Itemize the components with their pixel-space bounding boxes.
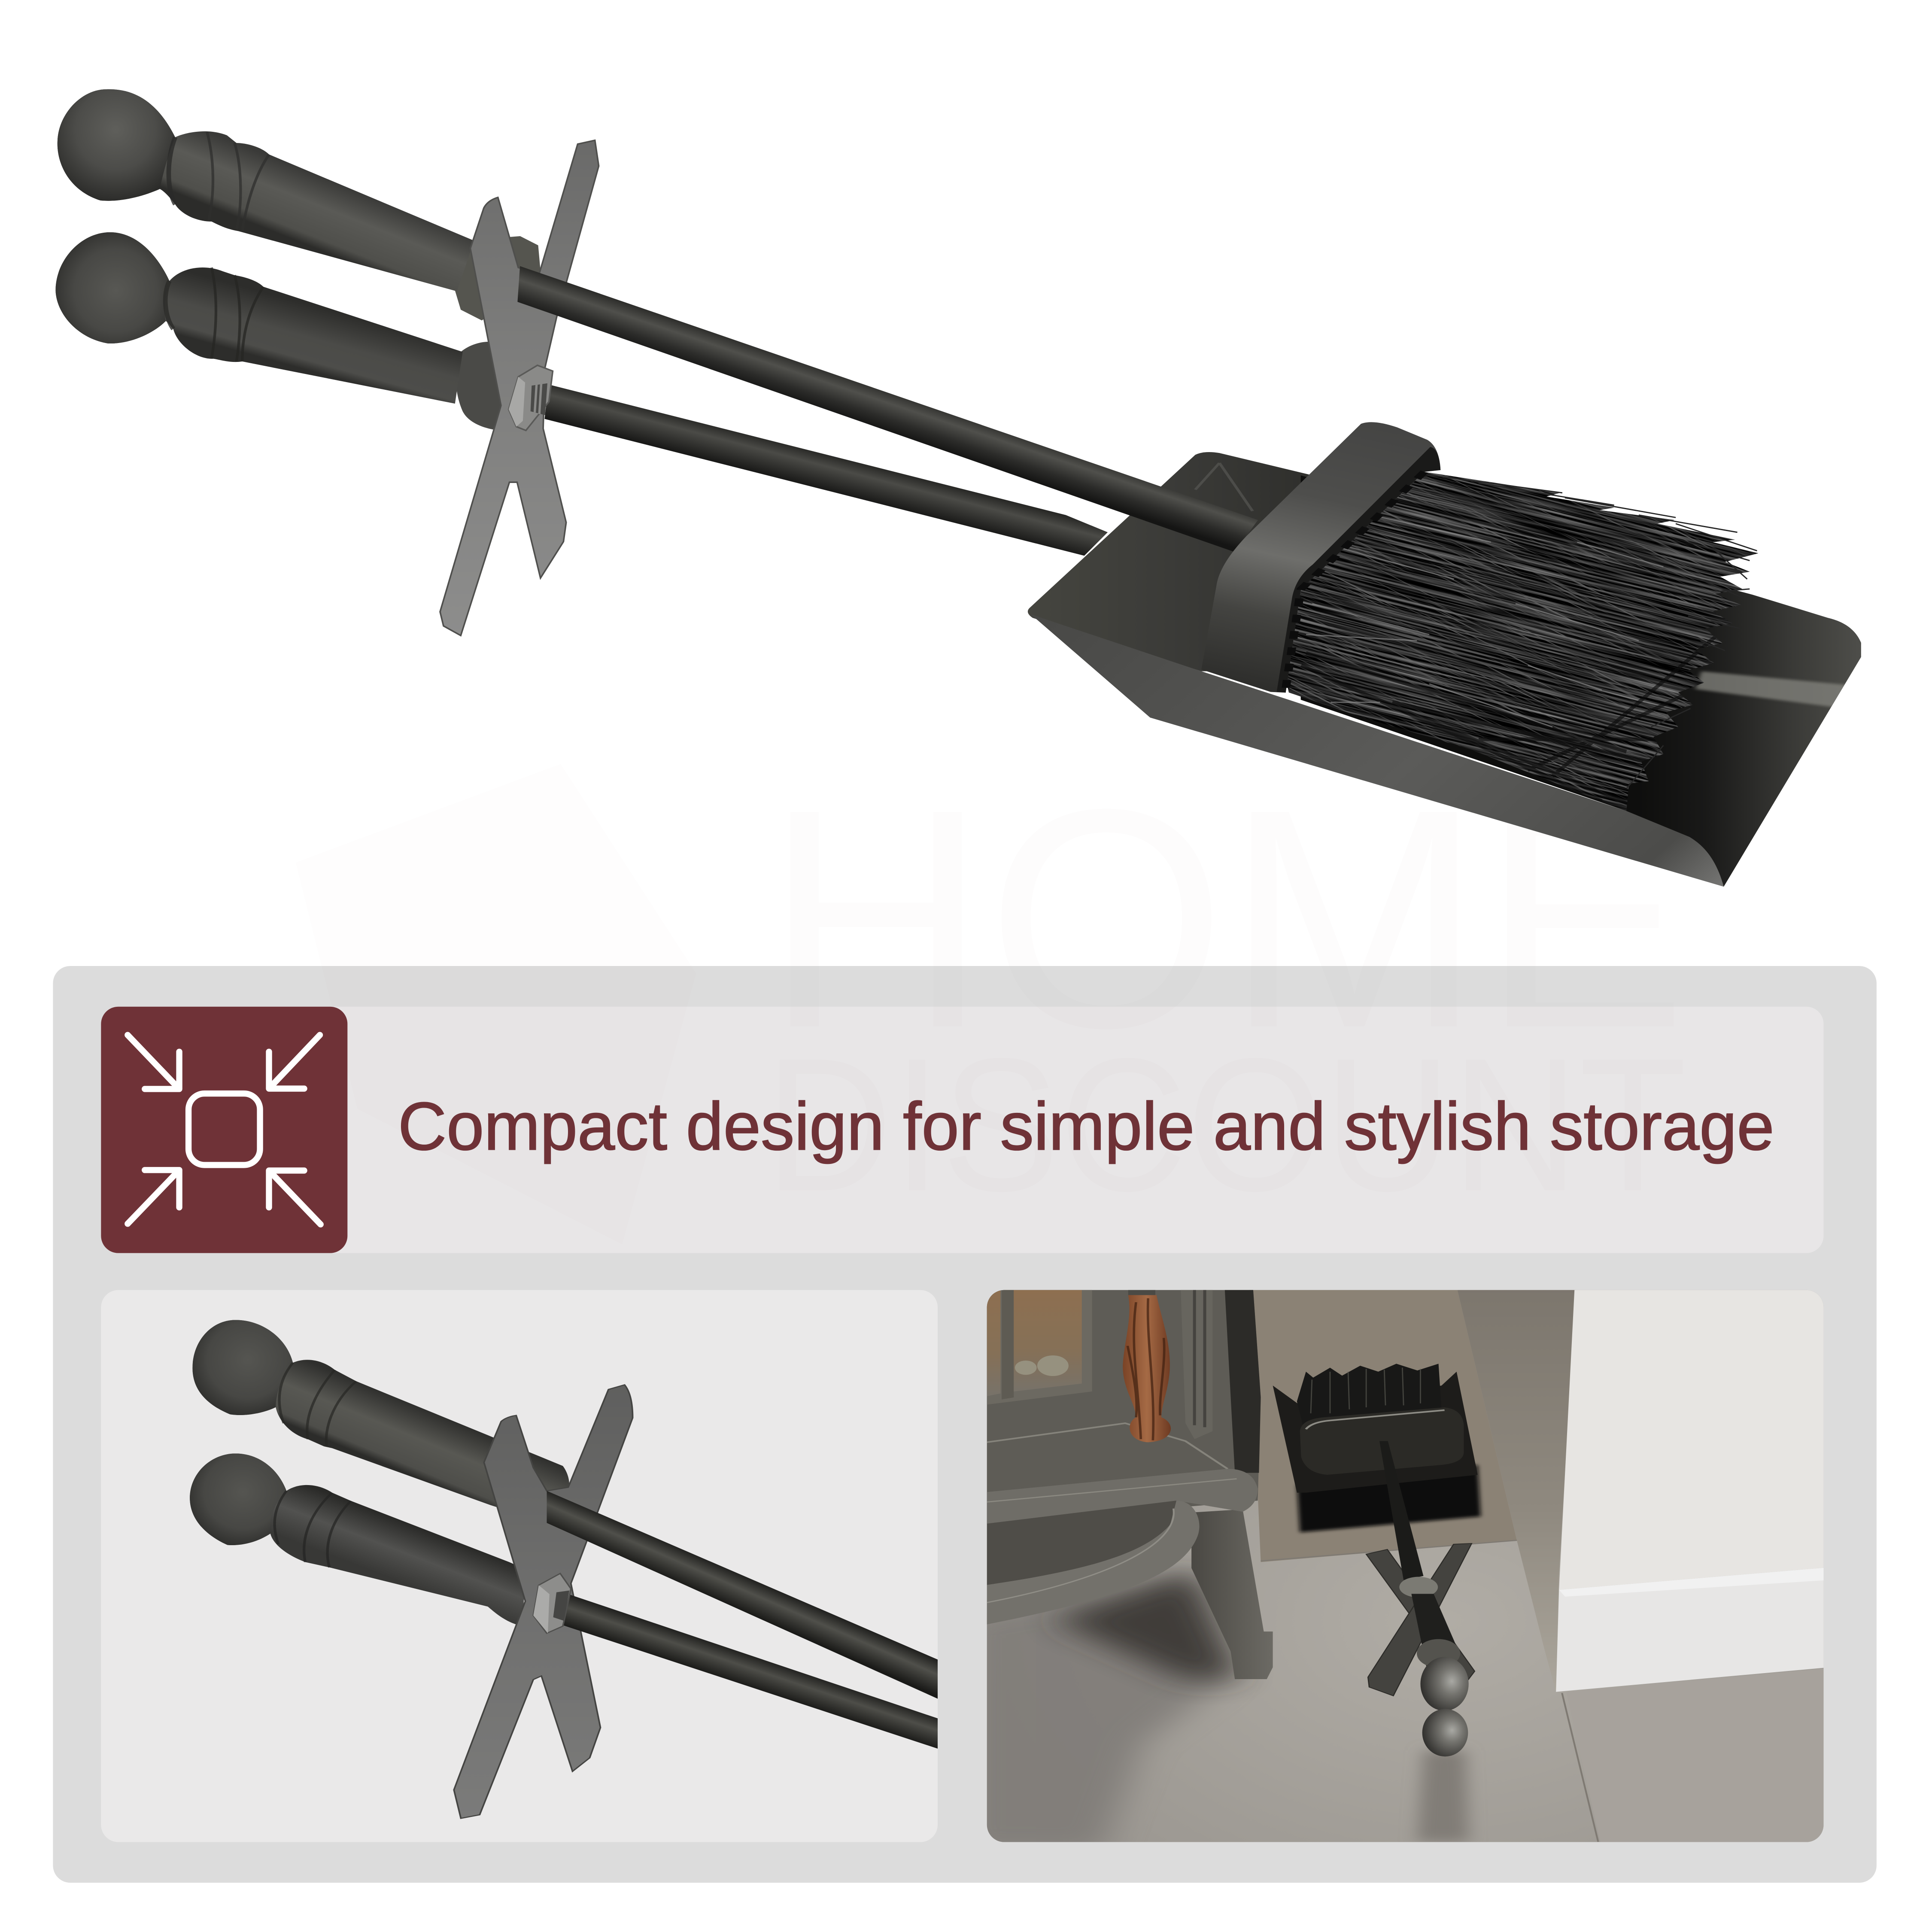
handle upper — [58, 89, 541, 320]
stove foot arch — [981, 1501, 1200, 1625]
handle upper inset — [192, 1320, 569, 1523]
dustpan — [1028, 452, 1873, 887]
handle rod upright — [1379, 1441, 1423, 1580]
dark shadow under stove — [1053, 1572, 1239, 1679]
handle bead — [1417, 1639, 1460, 1668]
skirting board — [1556, 1567, 1830, 1692]
handle lower — [55, 232, 505, 431]
brush ferrule — [1201, 422, 1440, 693]
fluted stove column — [1181, 1286, 1212, 1439]
stove leg — [1191, 1510, 1273, 1679]
rod: brush handle — [517, 266, 1258, 552]
headline text: Compact design for simple and stylish storage — [398, 1089, 1774, 1164]
shadow of dustpan — [1297, 1465, 1481, 1532]
panel: close-up of handles — [101, 1290, 938, 1842]
cross stand inset — [454, 1385, 633, 1818]
rod lower inset — [560, 1594, 939, 1749]
alcove side wall — [1457, 1286, 1576, 1692]
floor tiles — [981, 1282, 1830, 1846]
bottom panel background — [53, 966, 1877, 1883]
shadow on floor at left — [963, 1572, 1227, 1854]
knob far — [1420, 1657, 1469, 1711]
knob near — [1422, 1709, 1468, 1756]
inset: close-up of handles and cross stand — [190, 1320, 939, 1818]
cross stand plate — [440, 140, 599, 635]
stray hairs — [1425, 474, 1757, 789]
panel: headline bar — [101, 1007, 1823, 1253]
photo: set stored beside a wood stove — [963, 1282, 1830, 1854]
cross stand upright — [1366, 1543, 1475, 1696]
floor right of wall — [1566, 1668, 1830, 1846]
handle shaft — [1411, 1594, 1460, 1667]
stove upper body — [981, 1286, 1261, 1525]
stove door glass — [981, 1286, 1092, 1405]
product: brush and dustpan set — [55, 89, 1861, 887]
stove moulding — [981, 1469, 1258, 1525]
brush ferrule upright — [1300, 1407, 1464, 1475]
back floor area — [1249, 1286, 1517, 1562]
handle lower inset — [190, 1453, 526, 1626]
rod upper inset — [547, 1491, 939, 1699]
brush bristles — [1288, 472, 1759, 811]
brush bristles upright — [1297, 1364, 1442, 1425]
watermark: Home Discount logo — [296, 744, 1687, 1245]
dustpan upright — [1273, 1372, 1478, 1493]
bristle highlights — [1311, 1368, 1420, 1413]
white wall — [1559, 1286, 1830, 1590]
wooden stove handle — [1123, 1286, 1171, 1442]
hex nut inset — [533, 1574, 571, 1633]
rod: dustpan handle — [544, 384, 1108, 556]
hex nut — [509, 365, 553, 431]
floor shadow of handle — [1417, 1750, 1469, 1842]
handle collar — [1399, 1577, 1438, 1598]
icon: compact arrows pointing to centre — [101, 1007, 347, 1253]
tile joints — [1261, 1540, 1598, 1842]
